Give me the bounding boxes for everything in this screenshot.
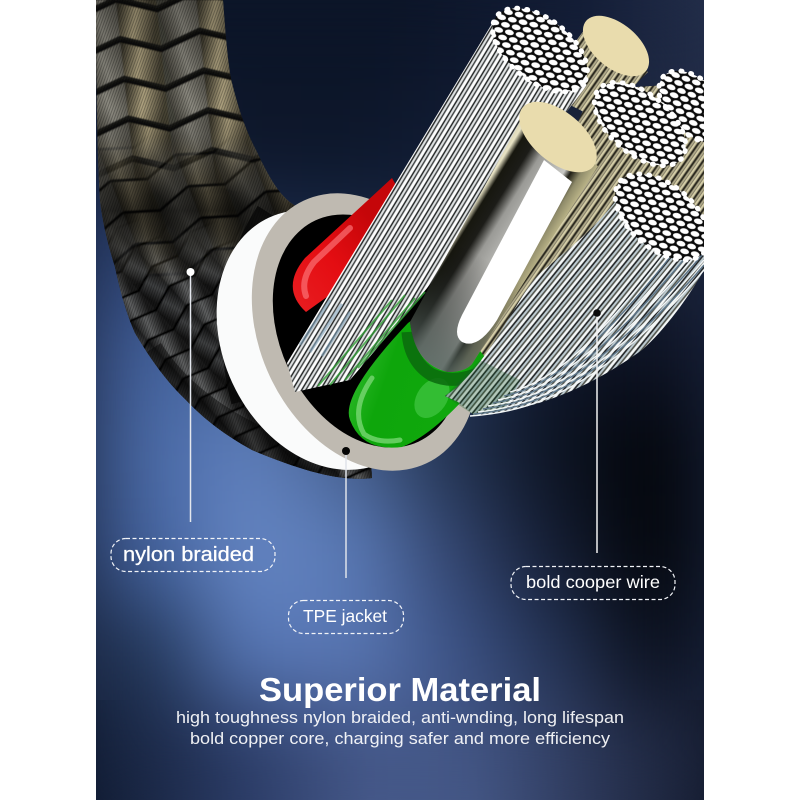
label: nylon braided: nylon braided: [123, 544, 254, 566]
rear right strand bundle cap: [656, 68, 704, 142]
label: nylon braided: [111, 538, 275, 572]
label: bold cooper wire: bold cooper wire: [526, 572, 660, 592]
silver copper conductor with gold end cap: [410, 102, 598, 372]
label: TPE jacket: TPE jacket: [303, 606, 387, 626]
subtitle text: high toughness nylon braided, anti-wnding, long lifespan: [176, 708, 624, 727]
label: bold cooper wire: [511, 566, 675, 600]
title: Superior Material: [259, 671, 541, 708]
rear centre strand bundle cap: [592, 80, 688, 168]
subtitle text: [176, 708, 624, 748]
grey TPE jacket ring: [252, 193, 470, 471]
green insulated wire: [348, 321, 484, 448]
white TPE sleeve band: [216, 212, 368, 470]
callout line: bold copper wire: [593, 309, 601, 553]
subtitle text: bold copper core, charging safer and more efficiency: [190, 729, 611, 748]
front strand bundle, lower right: [445, 172, 704, 417]
callout line: nylon braided: [186, 268, 194, 522]
nylon braided cable sleeve: [96, 0, 372, 479]
front strand bundle, upper: [287, 0, 602, 392]
rear olive strand mass: [470, 80, 704, 367]
red insulated wire: [292, 178, 396, 312]
label: TPE jacket: [288, 600, 404, 634]
callout line: TPE jacket: [342, 447, 350, 578]
rear gold conductor: [572, 16, 650, 112]
background gradient panel: [96, 0, 704, 800]
